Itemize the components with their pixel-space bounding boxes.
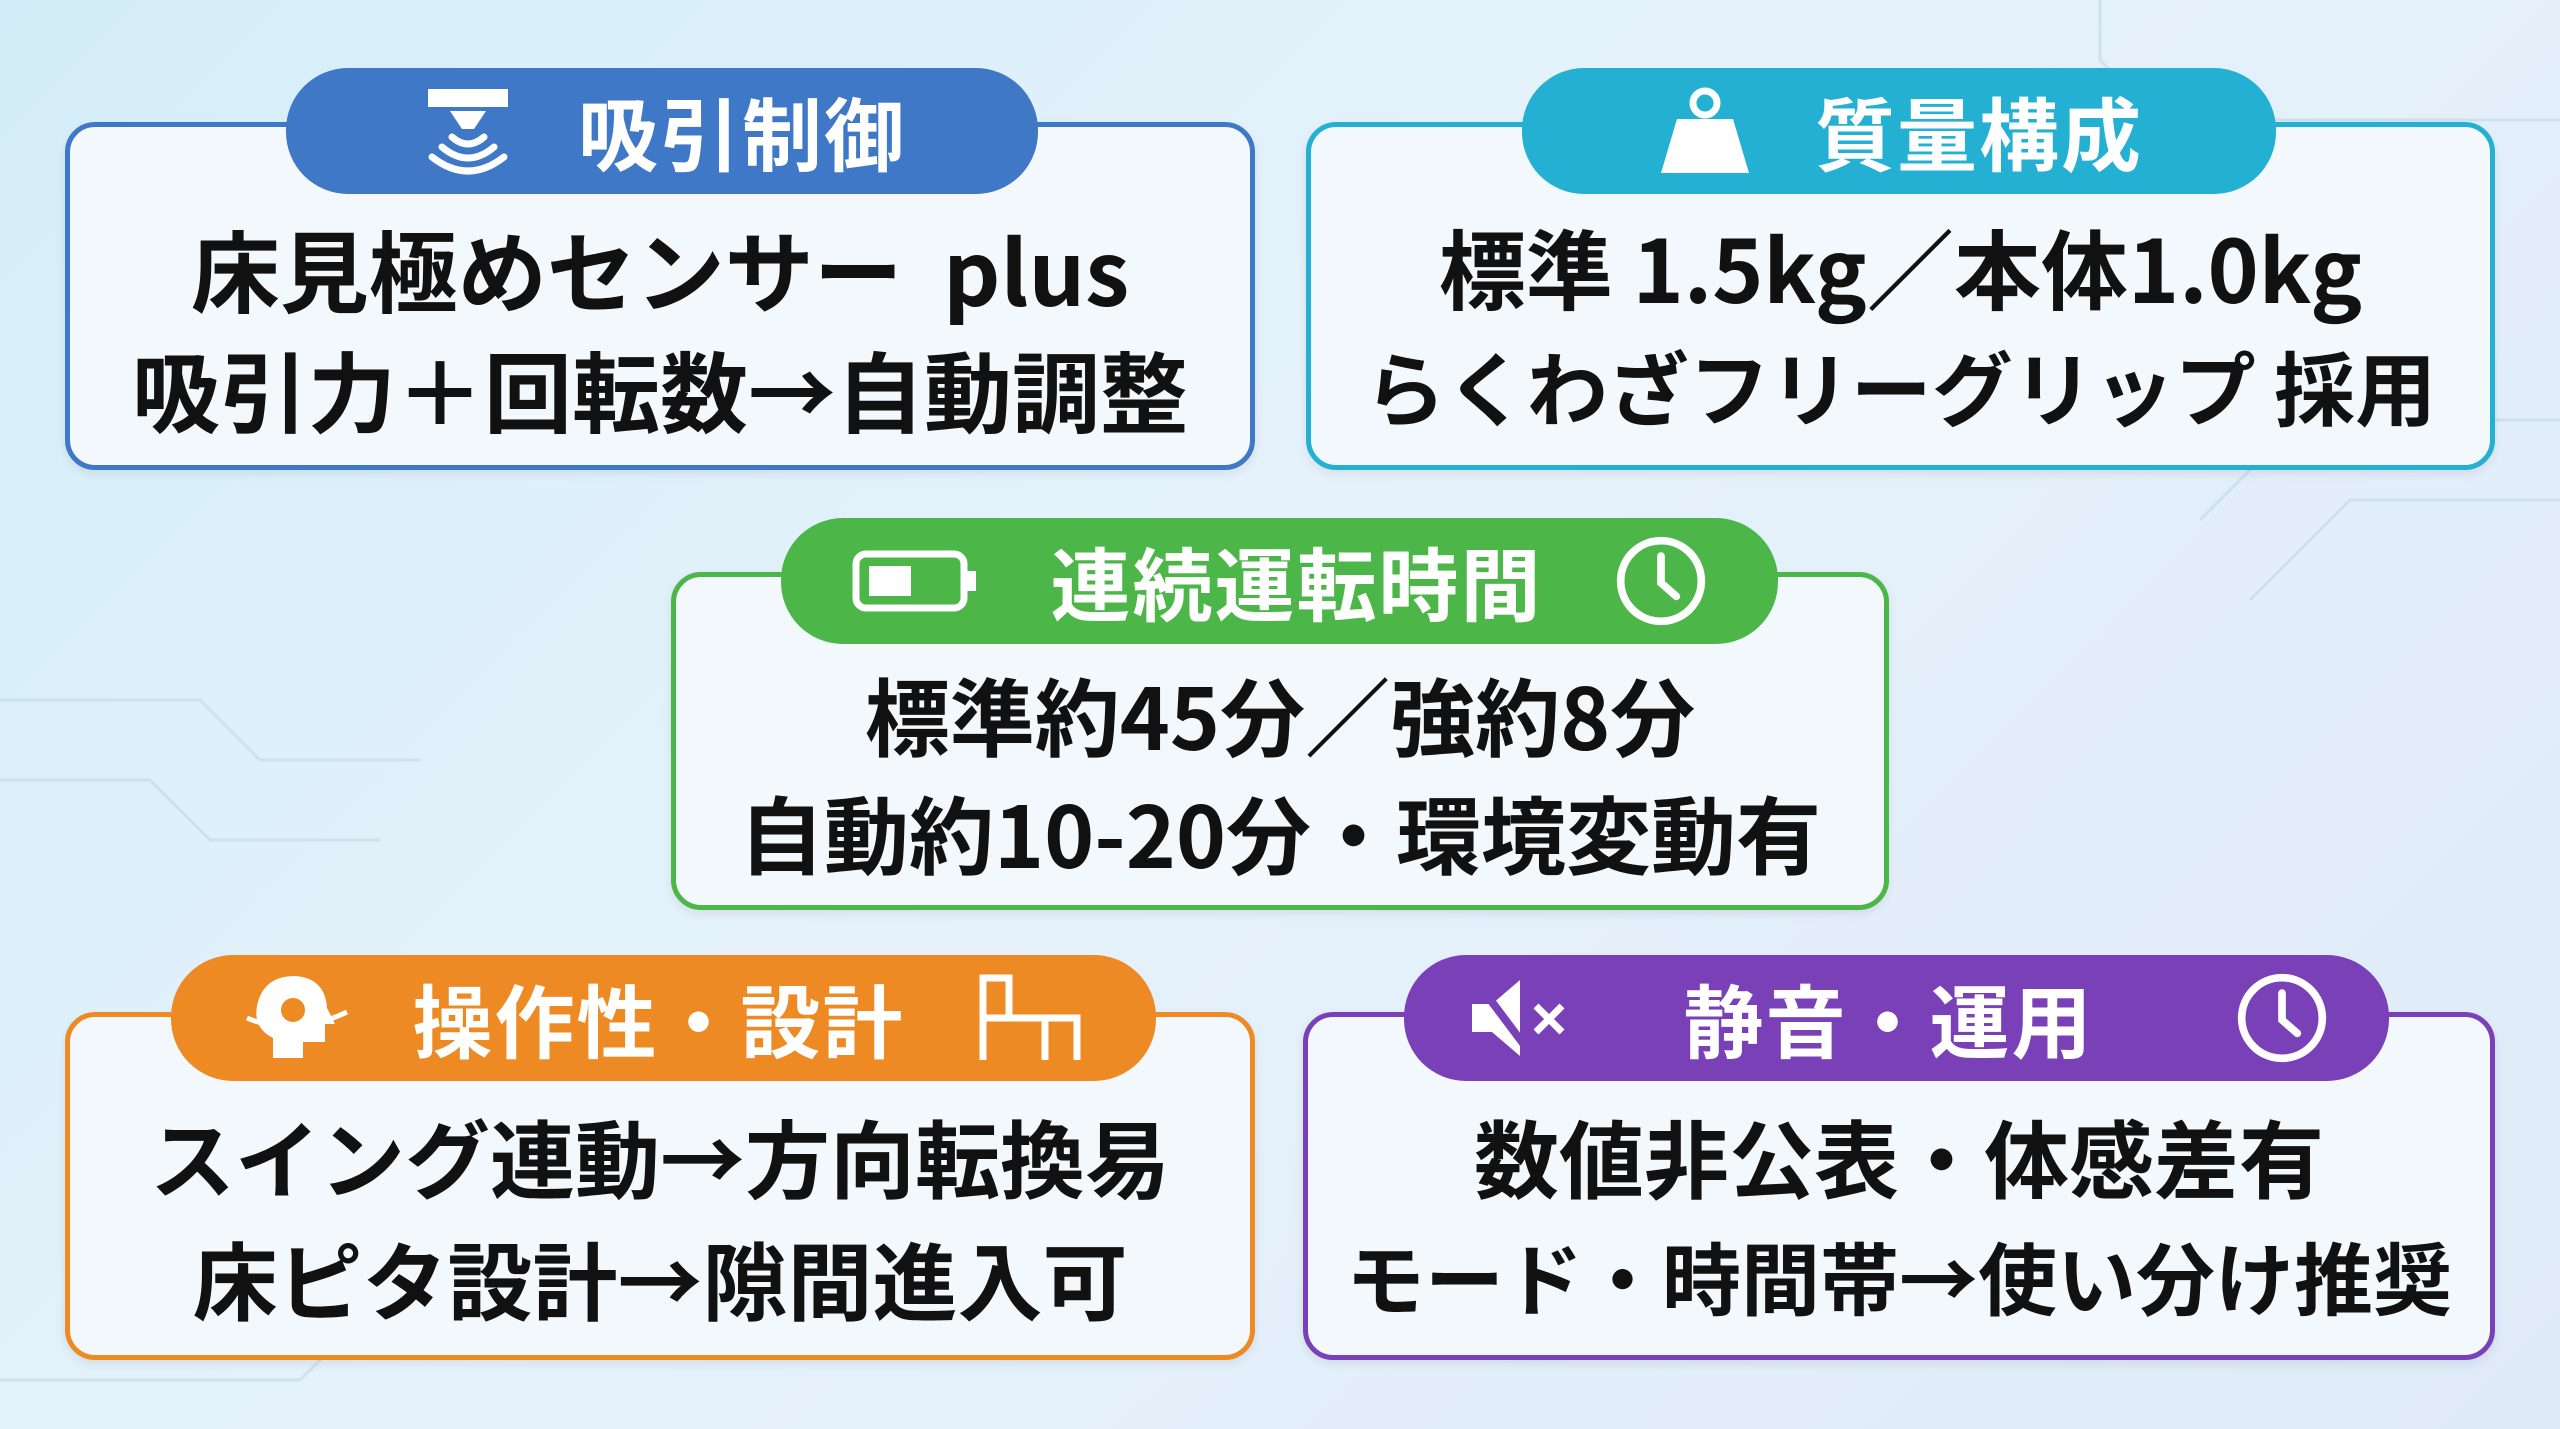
tab: operability heading <box>171 955 1156 1081</box>
tab: quietness heading: 静音・運用 <box>1684 960 2094 1076</box>
panel: quietness operation <box>1303 1012 2495 1360</box>
tab: suction control heading: 吸引制御 <box>578 73 906 189</box>
icon: head <box>246 976 348 1058</box>
text: line 1: 標準 1.5kg／本体1.0kg <box>1439 203 2362 329</box>
tab: quietness heading <box>1404 955 2389 1081</box>
panel: operability design <box>65 1012 1255 1360</box>
icon: mute <box>1472 980 1564 1056</box>
tab: runtime heading: 連続運転時間 <box>1050 523 1542 639</box>
text: line 2: 自動約10-20分・環境変動有 <box>739 770 1821 893</box>
text: line 1: スイング連動→方向転換易 <box>150 1094 1170 1217</box>
tab: mass heading: 質量構成 <box>1815 73 2143 189</box>
text: line 2: 吸引力＋回転数→自動調整 <box>132 325 1188 452</box>
text: line 1: 数値非公表・体感差有 <box>1474 1094 2324 1217</box>
icon: clock <box>2238 974 2326 1062</box>
tab: operability heading: 操作性・設計 <box>412 960 904 1076</box>
text: line 2: モード・時間帯→使い分け推奨 <box>1346 1217 2452 1332</box>
panel: suction control <box>65 122 1255 470</box>
tab: mass heading <box>1522 68 2276 194</box>
panel: mass composition <box>1306 122 2495 470</box>
tab: suction control heading <box>286 68 1038 194</box>
icon: furniture <box>980 974 1080 1060</box>
text: line 2: 床ピタ設計→隙間進入可 <box>192 1216 1128 1339</box>
icon: clock <box>1616 536 1706 626</box>
icon: battery <box>852 550 976 612</box>
tab: runtime heading <box>781 518 1778 644</box>
icon: sensor <box>428 89 508 175</box>
text: line 1: 床見極めセンサー plus <box>191 203 1129 332</box>
icon: weight <box>1661 88 1749 173</box>
text: line 2: らくわざフリーグリップ 採用 <box>1365 327 2436 444</box>
text: line 1: 標準約45分／強約8分 <box>865 652 1695 775</box>
panel: continuous runtime <box>671 572 1889 910</box>
